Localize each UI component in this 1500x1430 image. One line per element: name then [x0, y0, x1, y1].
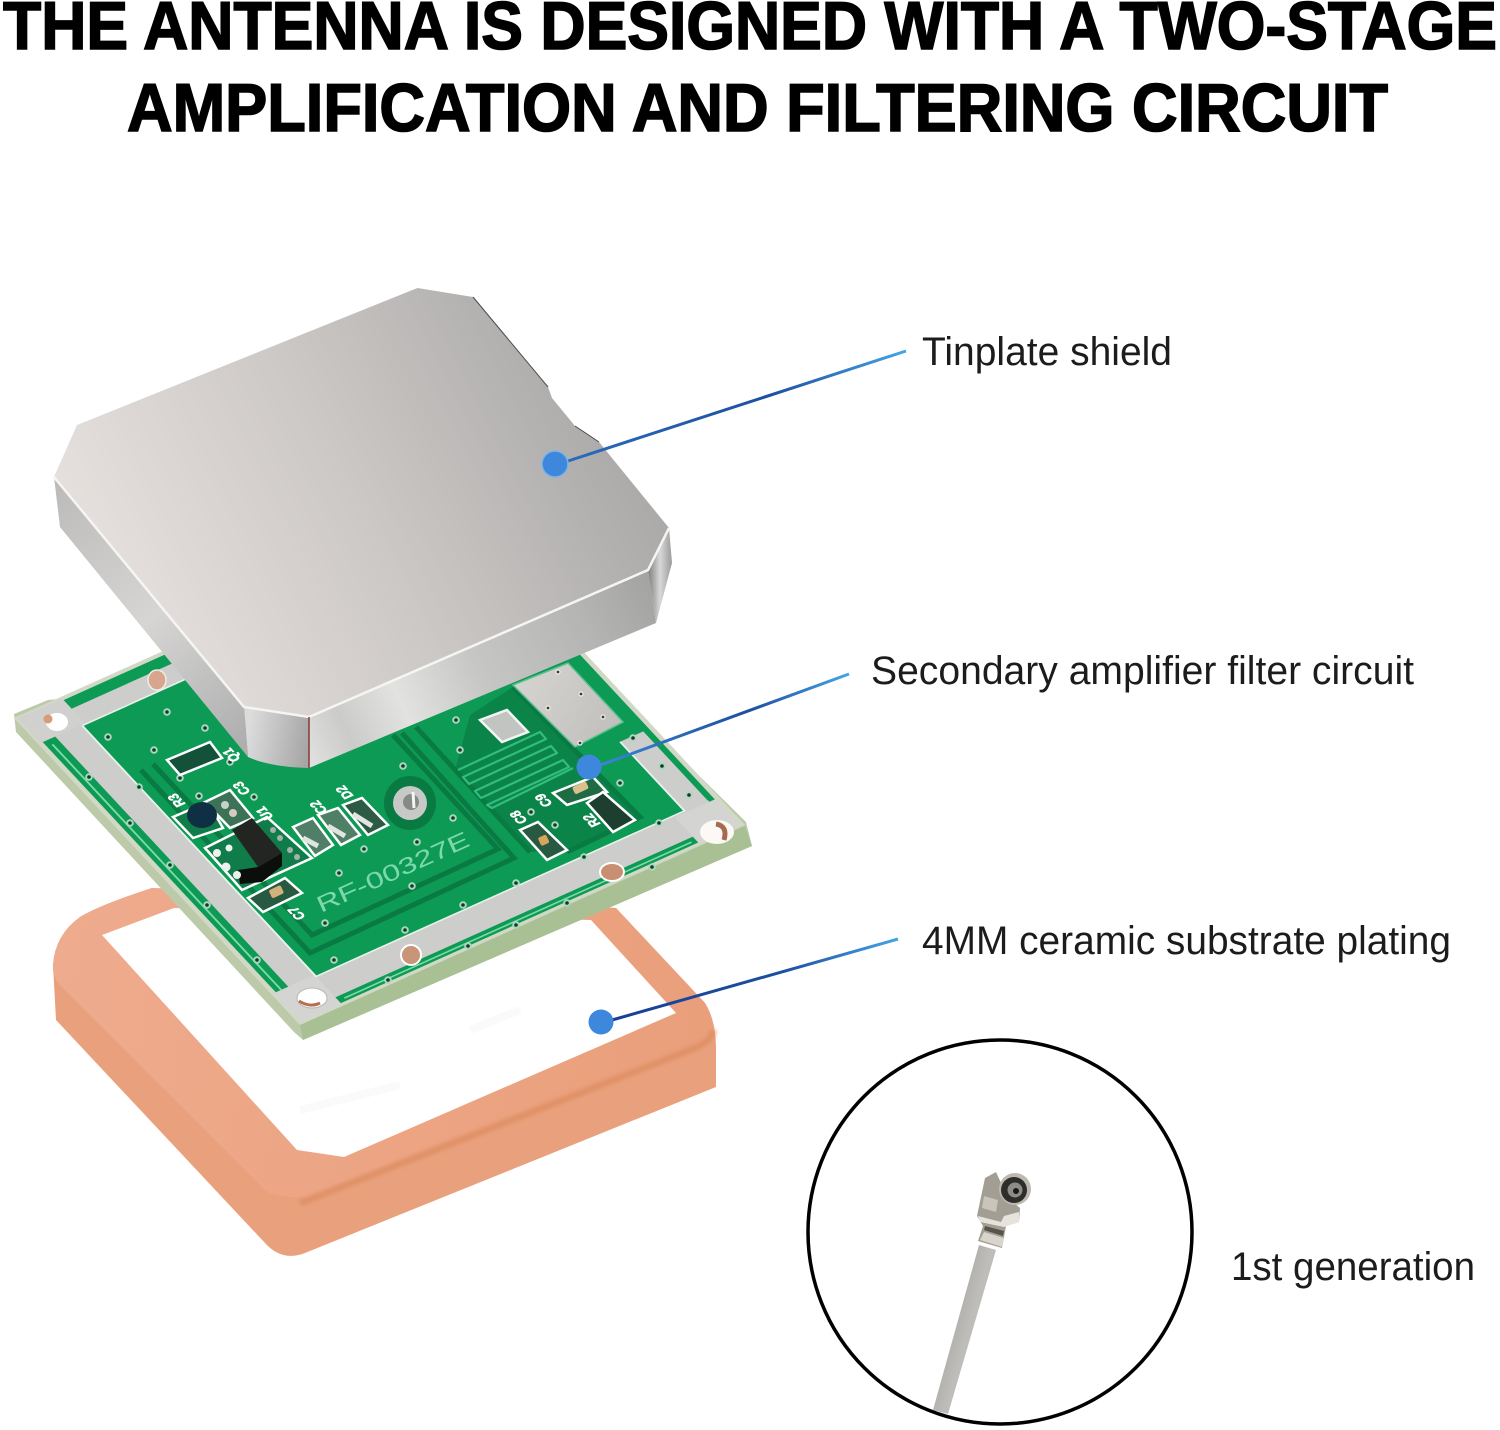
filter chip [480, 710, 528, 742]
component details [187, 781, 589, 899]
board marking: RF-00327E [312, 826, 473, 918]
silver pad [513, 663, 623, 747]
silkscreen labels: C8 [506, 808, 531, 826]
callout: ceramic substrate [588, 919, 1451, 1034]
silkscreen labels: R2 [579, 811, 604, 829]
circuit board [14, 518, 752, 1040]
silkscreen labels: C3 [229, 779, 254, 797]
silkscreen labels: C7 [284, 904, 309, 922]
silkscreen labels: C2 [306, 798, 331, 816]
callout: ceramic substrate: 4MM ceramic substrate plating [922, 919, 1451, 963]
silkscreen labels: U1 [252, 804, 277, 822]
metal corners [18, 699, 85, 743]
silkscreen labels: R3 [164, 791, 189, 809]
shield top face [54, 288, 669, 717]
exploded antenna diagram [14, 288, 752, 1256]
tinplate shield [54, 288, 672, 768]
callout: secondary amplifier filter circuit: Secondary amplifier filter circuit [871, 649, 1414, 693]
small components [167, 742, 635, 912]
shield right side [309, 570, 656, 768]
shield right-corner facet [648, 528, 672, 623]
title [3, 0, 1497, 146]
connector [977, 1172, 1031, 1248]
silkscreen labels: C9 [531, 791, 556, 809]
inset circle [808, 1040, 1192, 1424]
screw post [384, 776, 436, 830]
coaxial cable [933, 1245, 996, 1414]
callout: secondary amplifier filter circuit [576, 649, 1414, 780]
mounting holes [44, 670, 734, 1008]
callout: tinplate shield [542, 330, 1172, 477]
silkscreen labels [164, 746, 604, 922]
board surface [14, 518, 745, 1025]
silkscreen labels: Q1 [218, 746, 244, 764]
shield left side [54, 477, 248, 757]
vias [86, 709, 692, 983]
meander filter trace [458, 732, 573, 808]
silkscreen labels: D2 [332, 783, 357, 801]
callout: tinplate shield: Tinplate shield [922, 330, 1172, 374]
ceramic substrate plating [53, 888, 716, 1256]
title: AMPLIFICATION AND FILTERING CIRCUIT [127, 70, 1388, 146]
dark traces [141, 687, 640, 953]
shield edge highlights [54, 477, 669, 717]
connector inset [808, 1040, 1192, 1424]
meander zone [455, 687, 640, 852]
shield near-corner facet [244, 707, 309, 768]
label: 1st generation: 1st generation [1231, 1245, 1475, 1289]
